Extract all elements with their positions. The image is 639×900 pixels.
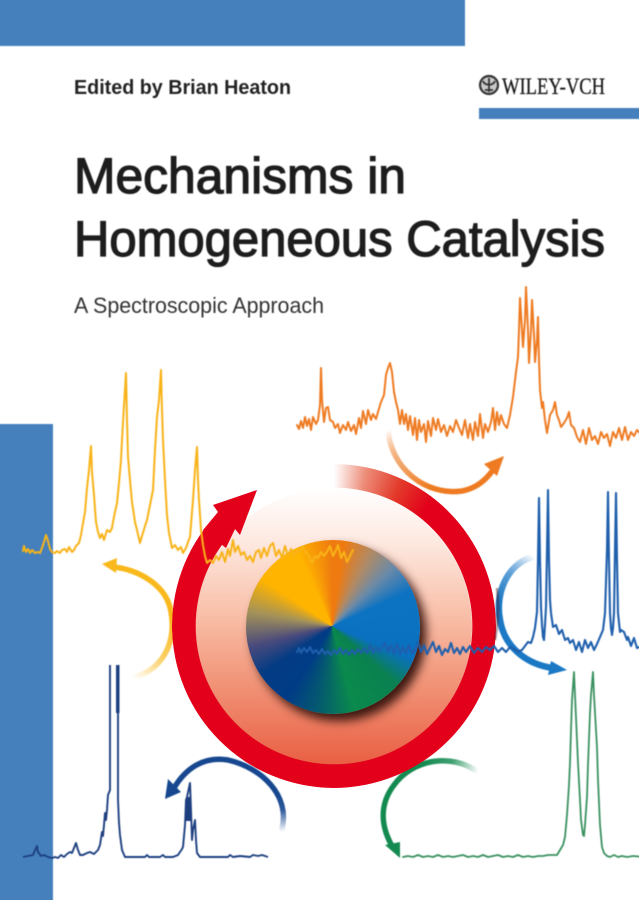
red ring: [172, 464, 496, 788]
title: [74, 148, 605, 267]
red cycle ring with arrow: [172, 464, 496, 788]
arrow: orange: [388, 430, 504, 492]
ring arrowhead: [203, 490, 257, 548]
spectrum: blue: [297, 490, 639, 655]
title: Mechanisms in: [74, 148, 406, 204]
spectrum: orange: [297, 287, 639, 446]
shadow on ring edge from blue arrow: [495, 588, 498, 640]
navy peak thick top: [116, 665, 120, 713]
top blue bar: [0, 0, 465, 46]
publisher blue bar: [479, 108, 639, 119]
subtitle: A Spectroscopic Approach: [74, 293, 324, 318]
title: Homogeneous Catalysis: [74, 211, 605, 267]
spectrum: yellow: [23, 370, 353, 563]
colour wheel: [246, 540, 420, 714]
arrow: green: [383, 761, 478, 858]
navy small peak thick part: [186, 797, 191, 821]
gradient inner disc: [195, 488, 472, 765]
left blue bar: [0, 424, 53, 900]
icon: publisher emblem: [480, 76, 498, 94]
arrow: yellow: [102, 558, 172, 677]
spectrum: navy: [23, 665, 268, 858]
spectrum: green: [403, 672, 639, 857]
publisher name: WILEY-VCH: [502, 74, 605, 99]
editor line: Edited by Brian Heaton: [74, 77, 291, 99]
arrow: navy: [165, 759, 283, 829]
arrow: blue: [499, 557, 567, 675]
publisher logo: [480, 74, 605, 99]
